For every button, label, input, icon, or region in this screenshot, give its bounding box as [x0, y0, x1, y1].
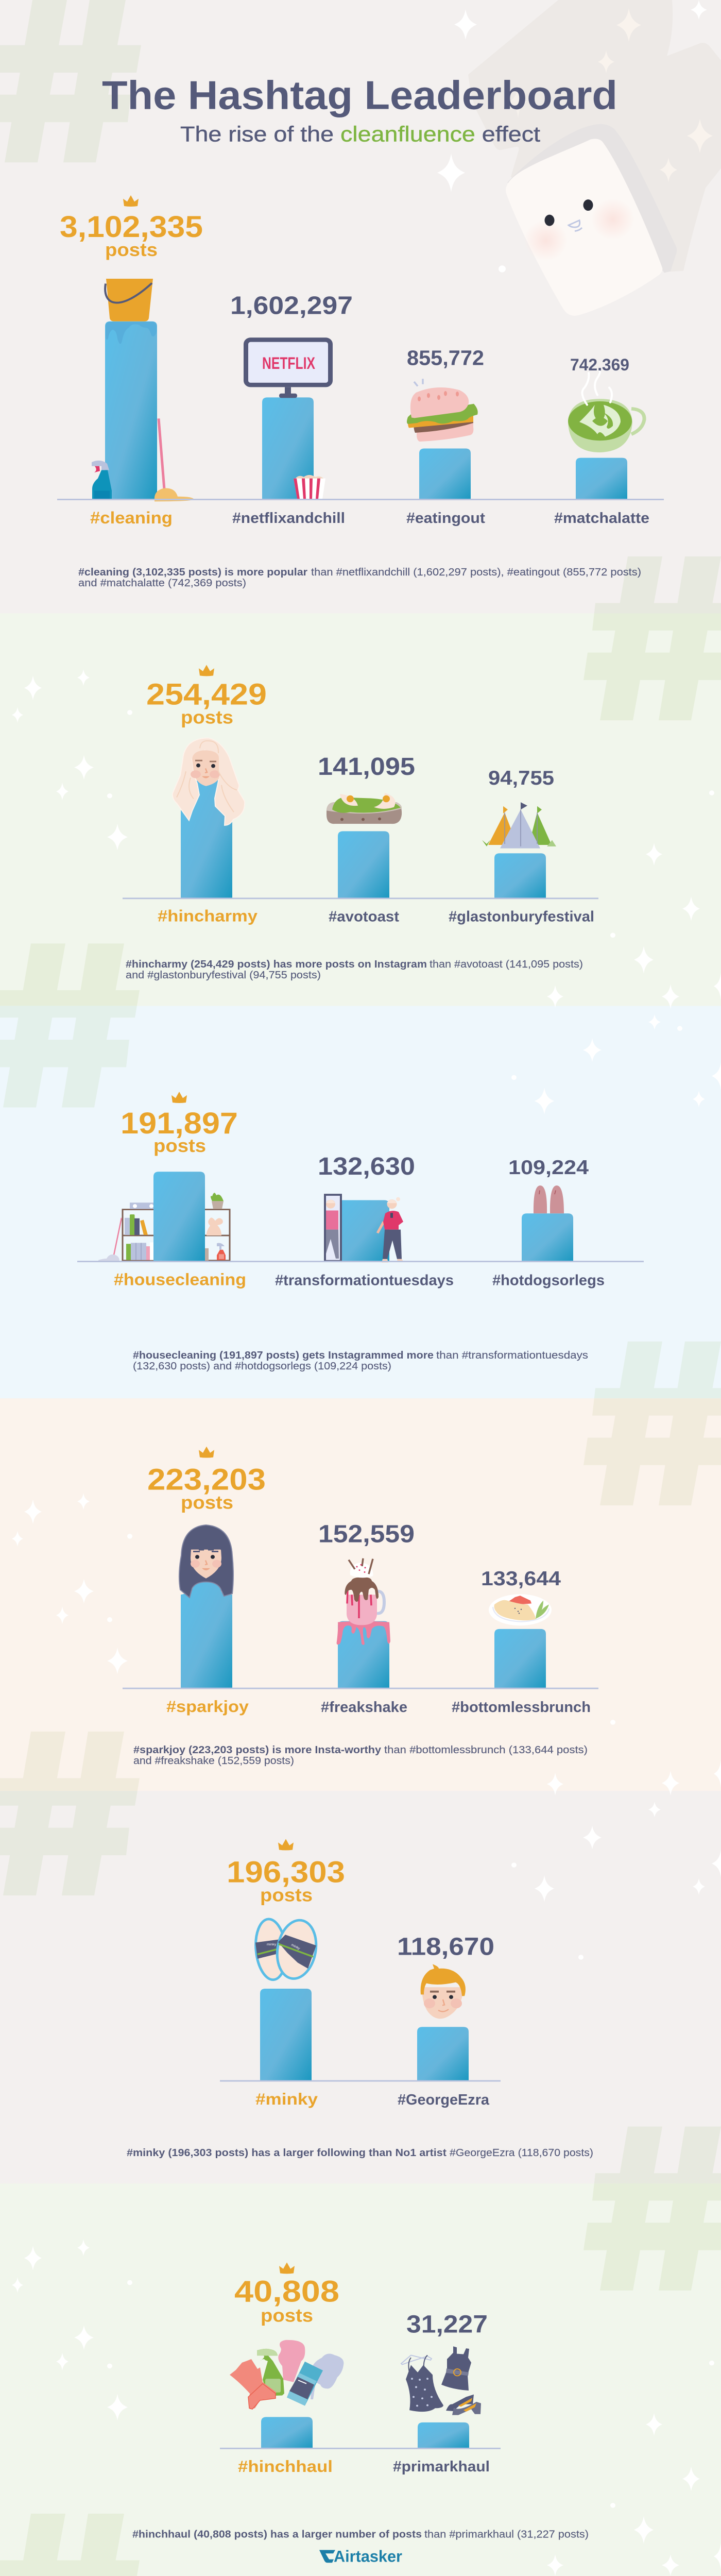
winner crown — [171, 1092, 187, 1103]
icon: freakshake jar — [345, 1558, 384, 1625]
chart: hinchhaul bars — [220, 2262, 501, 2476]
winner posts unit: posts — [181, 707, 233, 728]
caption — [133, 1744, 588, 1767]
caption — [132, 2529, 589, 2540]
caption — [127, 2147, 593, 2159]
icon: mirror and reflection — [325, 1195, 341, 1261]
icon: bucket — [105, 279, 153, 321]
bar: cleaning — [105, 321, 157, 500]
label: avotoast: #avotoast — [329, 908, 399, 925]
value: glastonburyfestival: 94,755 — [488, 767, 554, 789]
icon: spray bottle — [92, 461, 112, 499]
icon: minky slippers: minky — [267, 1943, 277, 1946]
icon: netflix monitor — [246, 340, 331, 398]
icon: netflix monitor: NETFLIX — [262, 354, 315, 373]
icon: mop — [154, 418, 194, 501]
icon: popcorn — [294, 475, 325, 499]
bar: transformationtuesdays — [338, 1200, 389, 1261]
chart: hincharmy bars — [123, 665, 598, 925]
title: The Hashtag Leaderboard — [102, 73, 617, 117]
icon: shelving unit — [123, 1193, 230, 1261]
logo: Airtasker: Airtasker — [334, 2547, 402, 2565]
bar: primarkhaul — [418, 2422, 469, 2448]
axis line — [123, 1688, 598, 1689]
value: netflixandchill: 1,602,297 — [230, 291, 353, 319]
winner posts unit: posts — [153, 1135, 206, 1156]
winner crown — [279, 2262, 295, 2274]
bar: hinchhaul — [261, 2417, 313, 2448]
chart: cleaning bars — [57, 195, 664, 528]
icon: dark-haired woman portrait — [179, 1525, 233, 1598]
label: cleaning: #cleaning — [90, 509, 173, 528]
icon: mop — [98, 1218, 122, 1261]
label: primarkhaul: #primarkhaul — [393, 2459, 490, 2475]
value: transformationtuesdays: 132,630 — [318, 1152, 415, 1180]
label: hincharmy: #hincharmy — [158, 907, 258, 925]
caption: #GeorgeEzra (118,670 posts) — [450, 2147, 593, 2159]
bar: sparkjoy — [181, 1582, 232, 1688]
icon: minky slippers: minky — [290, 1943, 301, 1951]
label: freakshake: #freakshake — [321, 1699, 407, 1716]
icon: pink syrup drip — [337, 1621, 390, 1645]
icon: avocado toast — [327, 793, 402, 824]
label: hinchhaul: #hinchhaul — [238, 2458, 333, 2476]
caption: #cleaning (3,102,335 posts) is more popular — [78, 567, 307, 578]
bar: freakshake — [338, 1621, 389, 1688]
winner value: 254,429 — [146, 677, 267, 711]
icon: minky slippers — [253, 1918, 320, 1981]
subtitle: The rise of the cleanfluence effect — [180, 122, 540, 146]
label: bottomlessbrunch: #bottomlessbrunch — [452, 1699, 591, 1716]
axis line — [57, 499, 664, 500]
winner posts unit: posts — [260, 1884, 313, 1905]
caption: than #avotoast (141,095 posts) — [430, 959, 583, 970]
value: matchalatte: 742,369 — [570, 356, 629, 375]
label: housecleaning: #housecleaning — [114, 1270, 246, 1289]
value: primarkhaul: 31,227 — [406, 2310, 488, 2338]
chart: minky bars — [220, 1839, 501, 2108]
winner posts unit: posts — [261, 2305, 313, 2326]
icon: matcha latte — [568, 371, 644, 452]
panel: hincharmy leaderboard — [0, 613, 721, 1006]
bar: minky — [260, 1989, 312, 2080]
label: minky: #minky — [255, 2090, 318, 2108]
value: avotoast: 141,095 — [318, 752, 415, 781]
bar: glastonburyfestival — [494, 853, 546, 898]
axis line — [123, 897, 598, 899]
winner crown — [123, 195, 139, 207]
winner crown — [278, 1839, 294, 1850]
panel: minky leaderboard — [0, 1791, 721, 2183]
value: eatingout: 855,772 — [407, 346, 484, 369]
winner value: 40,808 — [234, 2275, 339, 2308]
icon: primark outfit — [401, 2346, 481, 2415]
caption: (132,630 posts) and #hotdogsorlegs (109,224 posts) — [133, 1361, 391, 1372]
axis line — [77, 1261, 644, 1262]
bar: hotdogsorlegs — [522, 1213, 573, 1261]
panel: sparkjoy leaderboard — [0, 1398, 721, 1791]
value: bottomlessbrunch: 133,644 — [481, 1568, 561, 1590]
caption: than #primarkhaul (31,227 posts) — [424, 2529, 589, 2540]
winner posts unit: posts — [105, 239, 158, 260]
value: GeorgeEzra: 118,670 — [397, 1932, 494, 1960]
axis line — [220, 2448, 501, 2449]
winner crown — [199, 1447, 214, 1458]
caption — [78, 567, 641, 589]
panel: cleaning leaderboard — [0, 0, 721, 613]
icon: George Ezra face — [421, 1964, 466, 2019]
caption: and #glastonburyfestival (94,755 posts) — [126, 969, 321, 981]
icon: cleaning haul — [230, 2340, 344, 2409]
caption: #housecleaning (191,897 posts) gets Instagrammed more — [133, 1350, 434, 1361]
label: matchalatte: #matchalatte — [554, 510, 649, 527]
icon: burger — [407, 379, 478, 442]
icon: hotdog legs — [534, 1185, 564, 1213]
label: transformationtuesdays: #transformationtuesdays — [275, 1272, 454, 1289]
water drips on bar — [106, 322, 157, 344]
label: glastonburyfestival: #glastonburyfestival — [449, 908, 594, 925]
caption — [126, 959, 583, 981]
winner crown — [199, 665, 214, 676]
caption — [133, 1350, 588, 1372]
bar: housecleaning — [153, 1172, 205, 1261]
illustration: giant marshmallow sponge — [468, 0, 721, 316]
bar: bottomlessbrunch — [494, 1629, 546, 1688]
chart: sparkjoy bars — [123, 1447, 598, 1716]
bar: netflixandchill — [262, 397, 314, 500]
label: GeorgeEzra: #GeorgeEzra — [398, 2091, 490, 2108]
icon: brunch plate — [489, 1594, 552, 1625]
value: hotdogsorlegs: 109,224 — [508, 1157, 589, 1179]
label: netflixandchill: #netflixandchill — [232, 510, 345, 527]
chart: housecleaning bars — [77, 1092, 644, 1289]
caption: and #matchalatte (742,369 posts) — [78, 578, 246, 589]
label: hotdogsorlegs: #hotdogsorlegs — [492, 1272, 605, 1289]
bar: avotoast — [338, 831, 389, 898]
winner value: 191,897 — [121, 1106, 238, 1140]
caption: #minky (196,303 posts) has a larger following than No1 artist — [127, 2147, 447, 2159]
caption: than #bottomlessbrunch (133,644 posts) — [384, 1744, 588, 1756]
caption: and #freakshake (152,559 posts) — [133, 1755, 294, 1767]
caption: #sparkjoy (223,203 posts) is more Insta-worthy — [133, 1744, 381, 1756]
bar: GeorgeEzra — [417, 2027, 469, 2080]
winner value: 196,303 — [227, 1855, 345, 1889]
bar: eatingout — [419, 448, 471, 500]
axis line — [220, 2080, 501, 2081]
icon: woman with phone — [377, 1197, 404, 1262]
panel: housecleaning leaderboard — [0, 1006, 721, 1398]
caption: #hincharmy (254,429 posts) has more posts on Instagram — [126, 959, 427, 970]
bar: hincharmy — [181, 780, 232, 898]
bar: matchalatte — [576, 458, 627, 500]
caption: than #netflixandchill (1,602,297 posts), #eatingout (855,772 posts) — [311, 567, 641, 578]
caption: #hinchhaul (40,808 posts) has a larger number of posts — [132, 2529, 422, 2540]
label: eatingout: #eatingout — [406, 510, 485, 527]
winner posts unit: posts — [181, 1492, 233, 1513]
value: freakshake: 152,559 — [318, 1519, 415, 1548]
caption: than #transformationtuesdays — [436, 1350, 588, 1361]
winner value: 3,102,335 — [60, 210, 203, 244]
icon: blonde woman portrait — [173, 738, 245, 825]
panel: hinchhaul leaderboard — [0, 2183, 721, 2576]
icon: festival tents — [482, 802, 556, 849]
winner value: 223,203 — [147, 1463, 266, 1496]
label: sparkjoy: #sparkjoy — [166, 1698, 249, 1716]
